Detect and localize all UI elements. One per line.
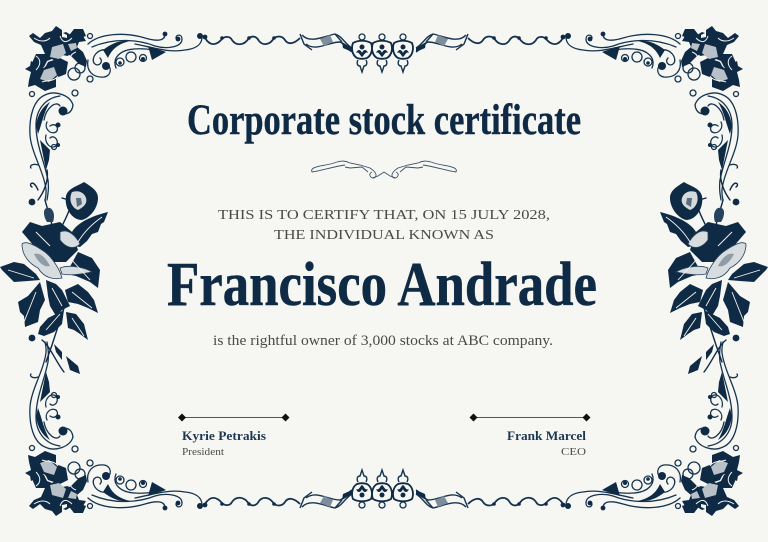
signature: CEO [470, 414, 590, 458]
floral ornament: right [660, 170, 768, 374]
certification statement: THIS IS TO CERTIFY THAT, ON 15 JULY 2028, [218, 208, 550, 223]
certification statement [218, 208, 550, 243]
corner ornament: top left [25, 26, 203, 200]
signature: president [178, 414, 290, 458]
flourish divider [312, 161, 456, 178]
corner ornament: top right [565, 26, 743, 200]
signature: president: Kyrie Petrakis [182, 428, 266, 443]
top border band [203, 34, 565, 72]
ownership statement: is the rightful owner of 3,000 stocks at ABC company. [213, 333, 553, 349]
corner ornament: bottom right [565, 342, 743, 516]
corner ornament: bottom left [25, 342, 203, 516]
recipient name: Francisco Andrade [167, 251, 597, 319]
certification statement: THE INDIVIDUAL KNOWN AS [274, 228, 494, 243]
signature: president: President [182, 446, 224, 458]
title: Corporate stock certificate [187, 97, 581, 144]
signature: CEO: Frank Marcel [507, 428, 586, 443]
signature: CEO: CEO [561, 446, 586, 458]
bottom border band [203, 470, 565, 508]
floral ornament: left [0, 170, 108, 374]
